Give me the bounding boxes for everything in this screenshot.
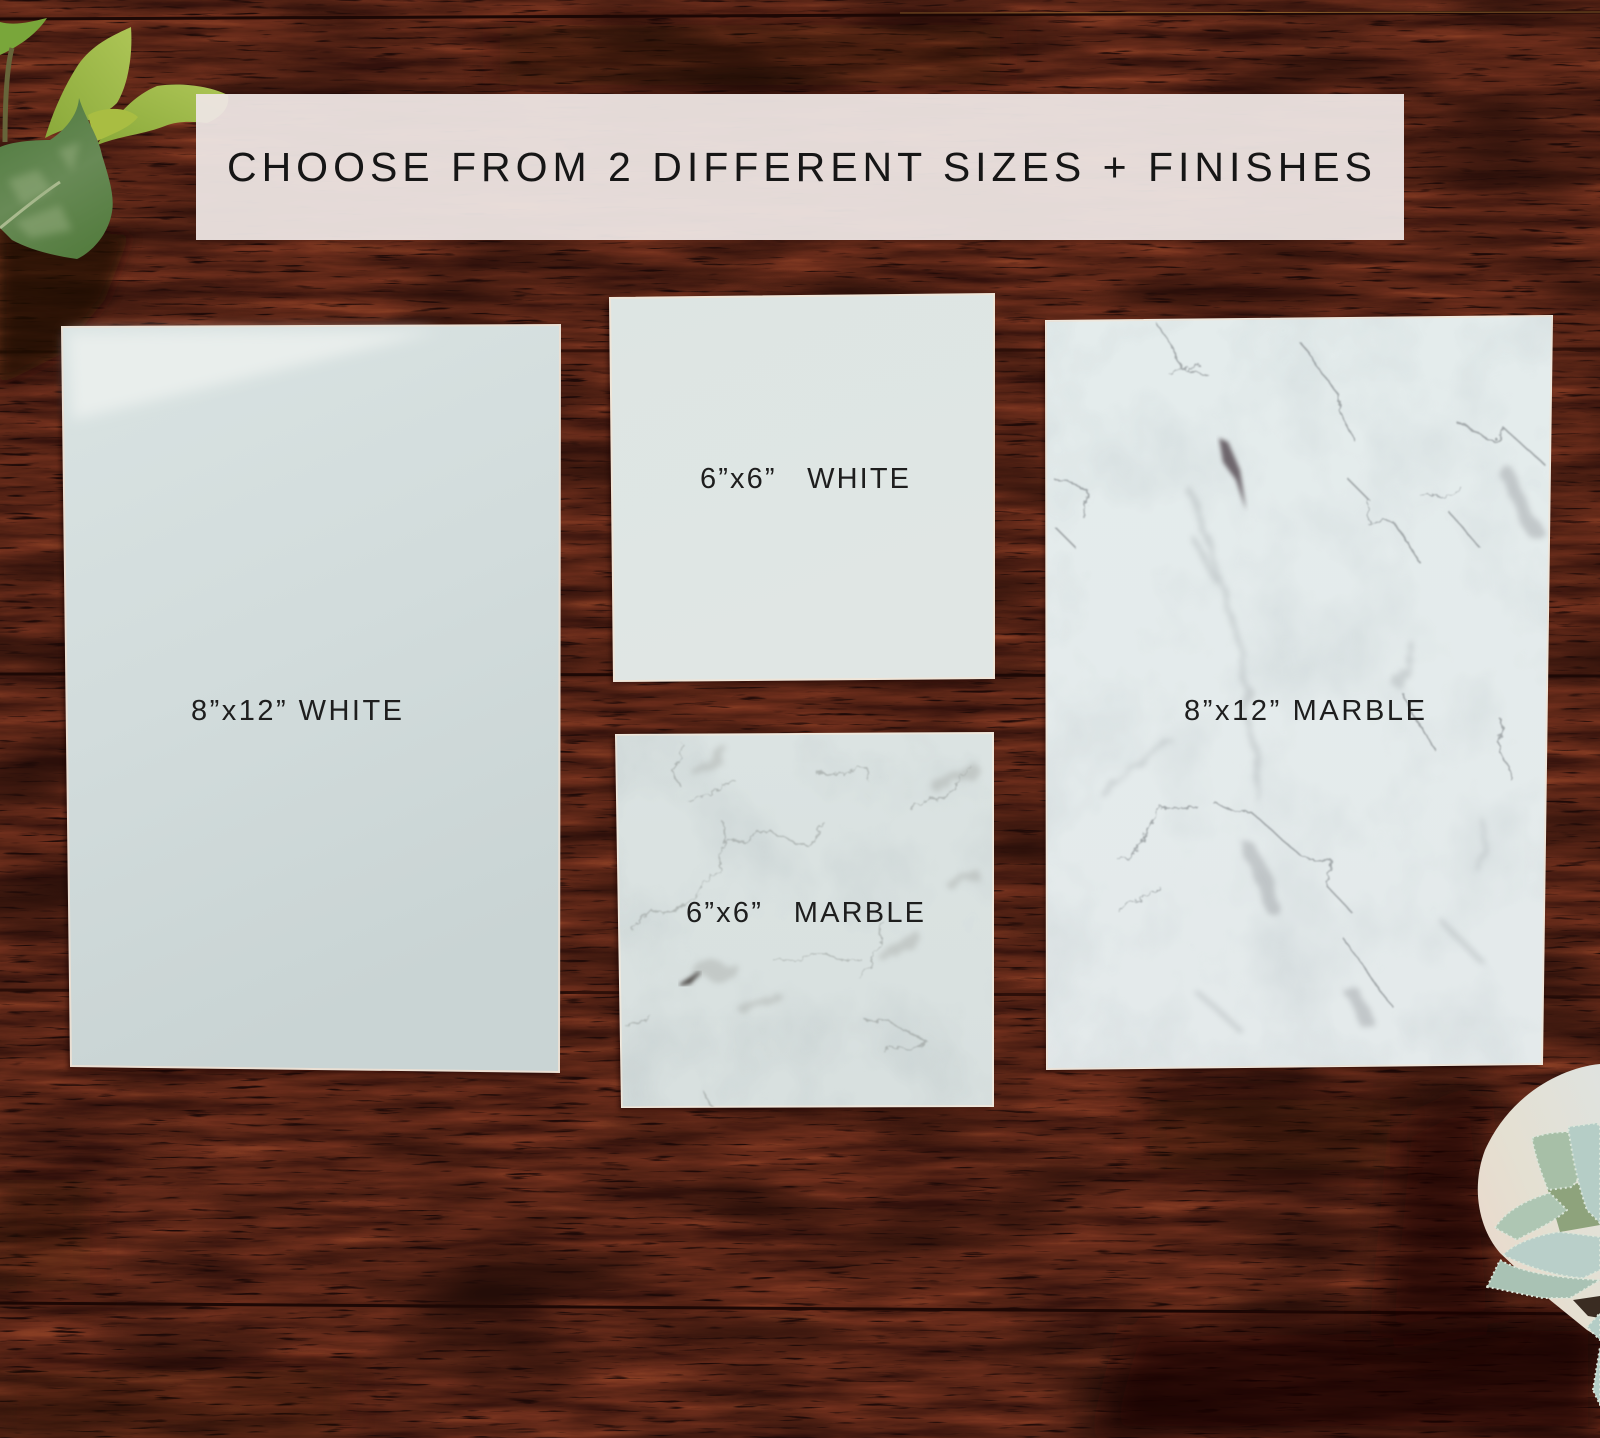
marble smudges <box>1250 472 1534 1020</box>
leaf stem <box>5 48 12 142</box>
marble veins <box>627 748 973 1105</box>
marble faint long veins <box>1100 492 1483 1030</box>
big leaf vein highlight <box>0 182 60 228</box>
middle lime leaf <box>88 109 138 142</box>
panel: 8x12 white tile <box>59 325 560 1076</box>
title text: CHOOSE FROM 2 DIFFERENT SIZES + FINISHES <box>227 144 1372 190</box>
big green leaf <box>0 98 113 259</box>
panel: 6x6 white tile <box>607 294 994 684</box>
dark marble blot <box>1219 438 1246 510</box>
title banner <box>196 94 1404 240</box>
banner panel <box>196 94 1404 240</box>
succulent leaves <box>1487 1123 1600 1405</box>
tile label: 8”x12” WHITE <box>191 695 402 727</box>
small top leaf <box>0 18 47 55</box>
tile label: 6”x6” WHITE <box>700 463 909 495</box>
dark marble fleck <box>680 972 700 985</box>
upper lime leaf <box>45 27 131 138</box>
soil <box>1573 1296 1600 1318</box>
sun highlight <box>68 331 440 420</box>
marble smudges <box>697 755 975 1010</box>
tile label: 6”x6” MARBLE <box>686 897 924 929</box>
tile label: 8”x12” MARBLE <box>1184 695 1425 727</box>
marble veins <box>1052 325 1547 1002</box>
panel: 6x6 marble tile <box>610 725 1000 1115</box>
right lime leaf <box>97 84 228 145</box>
panel: 8x12 marble tile <box>1040 310 1570 1080</box>
white pot <box>1478 1064 1600 1338</box>
icon: potted succulent bottom right <box>1478 1064 1600 1405</box>
icon: pothos leaves top left <box>0 18 228 259</box>
